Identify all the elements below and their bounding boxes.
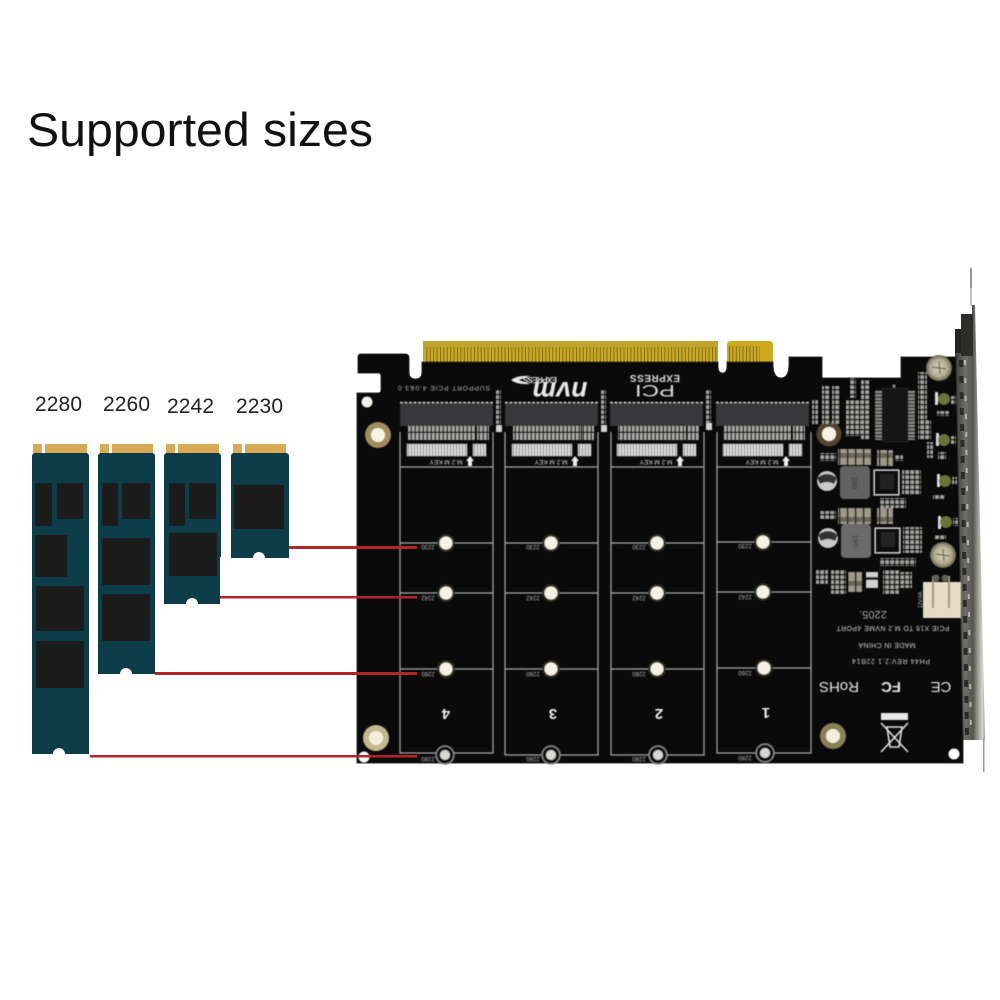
SSD module 2242 [164, 444, 221, 604]
M.2 slot 1: 2242 [738, 593, 752, 599]
red leader line 2230 [289, 546, 417, 549]
certification marks [819, 678, 951, 695]
silkscreen: board information [836, 608, 950, 664]
PCB board [357, 354, 963, 763]
M.2 slot 1: 2280 [738, 754, 752, 760]
power connector: 12V/4A [918, 591, 924, 608]
M.2 slot 4: 2280 [421, 755, 435, 761]
metal bracket [955, 268, 985, 772]
M.2 slot 2: 2 [655, 705, 663, 722]
power circuit 2 [818, 508, 922, 566]
regulator components [816, 569, 912, 594]
size labels: 2242 [167, 395, 214, 418]
M.2 slot 2: M.2 M KEY [639, 458, 672, 465]
M.2 slot 3: 2242 [526, 594, 540, 600]
M.2 slot 3: 2260 [526, 670, 540, 676]
SSD module 2260 [98, 444, 155, 674]
power circuit 1 [817, 449, 921, 508]
mounting holes [358, 396, 960, 762]
logo: PCI express [630, 372, 680, 400]
silkscreen: board information: 2205. [859, 608, 887, 620]
silkscreen: board information: PCIE X16 TO M.2 NVME 4PORT [836, 624, 950, 631]
M.2 slot 4: 2230 [421, 543, 435, 549]
M.2 slot 3: 2230 [526, 543, 540, 549]
M.2 slot 1: 1 [762, 704, 770, 721]
M.2 slot 4: 2260 [421, 670, 435, 676]
SSD module 2230 [231, 444, 289, 558]
logo: PCI express: EXPRESS [630, 372, 680, 383]
size labels: 2280 [35, 393, 82, 416]
M.2 slot 2: 2280 [632, 755, 646, 761]
M.2 slot 2: 2242 [632, 594, 646, 600]
power connector [918, 574, 961, 618]
M.2 slot 4: 4 [441, 705, 450, 722]
icon: WEEE bin [881, 713, 908, 752]
size labels: 2260 [103, 393, 150, 416]
certification marks: CE [931, 678, 951, 695]
certification marks: FC [881, 678, 901, 695]
controller chip [875, 384, 915, 442]
size labels: 2230 [236, 395, 283, 418]
title: Supported sizes [27, 103, 373, 156]
gold edge connector [423, 341, 773, 365]
M.2 slot 4 [400, 402, 493, 764]
SSD module 2280 [32, 444, 89, 754]
M.2 slot 2 [610, 402, 704, 764]
M.2 slot 4: 2242 [421, 594, 435, 600]
red leader line 2242 [220, 596, 417, 598]
silkscreen: board information: PH44 REV:2.1 22B14 [852, 657, 930, 664]
M.2 slot 2: 2260 [632, 670, 646, 676]
M.2 slot 1 [716, 402, 811, 762]
certification marks: RoHS [819, 678, 859, 695]
M.2 slot 2: 2230 [632, 543, 646, 549]
M.2 slot 1: 2260 [738, 669, 752, 675]
M.2 slot 3 [505, 402, 598, 764]
M.2 slot 3: 2280 [526, 755, 540, 761]
M.2 slot 1: 2230 [738, 542, 752, 548]
silkscreen: support text: SUPPORT PCIE 4.0&3.0 [398, 384, 490, 391]
red leader line 2260 [155, 672, 417, 675]
size labels [35, 393, 283, 418]
status LEDs [933, 392, 958, 540]
logo: PCI express: PCI [635, 381, 675, 400]
M.2 slot 1: M.2 M KEY [745, 458, 778, 465]
M.2 slot 4: M.2 M KEY [429, 458, 462, 465]
M.2 slot 3: M.2 M KEY [534, 458, 567, 465]
M.2 slot 3: 3 [549, 705, 557, 722]
power circuit 1: 1R0 [850, 477, 857, 490]
logo: nvm express: EXPRESS [522, 375, 557, 384]
silkscreen: board information: MADE IN CHINA [858, 641, 916, 648]
screws [926, 355, 956, 568]
red leader line 2280 [90, 755, 417, 758]
small components near chip [822, 372, 933, 458]
logo: nvm express: nvm [532, 376, 588, 407]
power circuit 2: 1R0 [851, 535, 858, 548]
small components between slots [496, 390, 818, 432]
